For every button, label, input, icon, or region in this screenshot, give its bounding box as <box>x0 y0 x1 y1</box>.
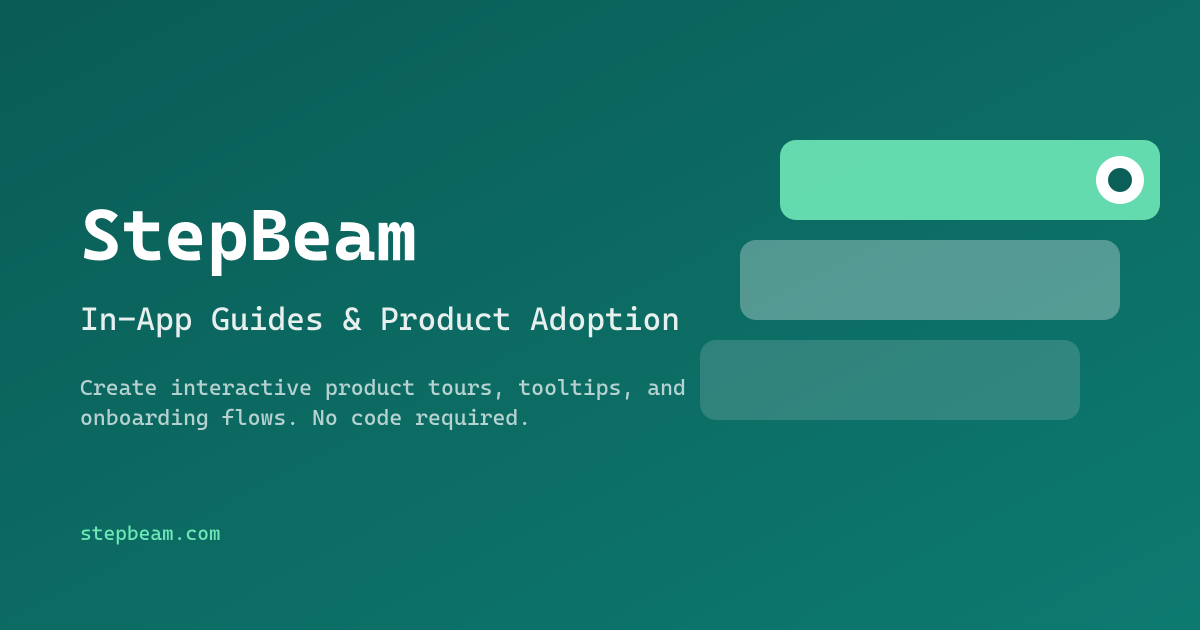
step bar: third <box>700 340 1080 420</box>
title: StepBeam <box>80 193 418 277</box>
description: Create interactive product tours, tooltips, and <box>80 376 686 401</box>
step bar: second <box>740 240 1120 320</box>
icon: toggle knob <box>1096 156 1144 204</box>
description <box>80 376 686 431</box>
description: onboarding flows. No code required. <box>80 406 531 431</box>
website url: stepbeam.com <box>80 521 221 545</box>
subtitle: In-App Guides & Product Adoption <box>80 300 680 338</box>
step bar: active <box>780 140 1160 220</box>
